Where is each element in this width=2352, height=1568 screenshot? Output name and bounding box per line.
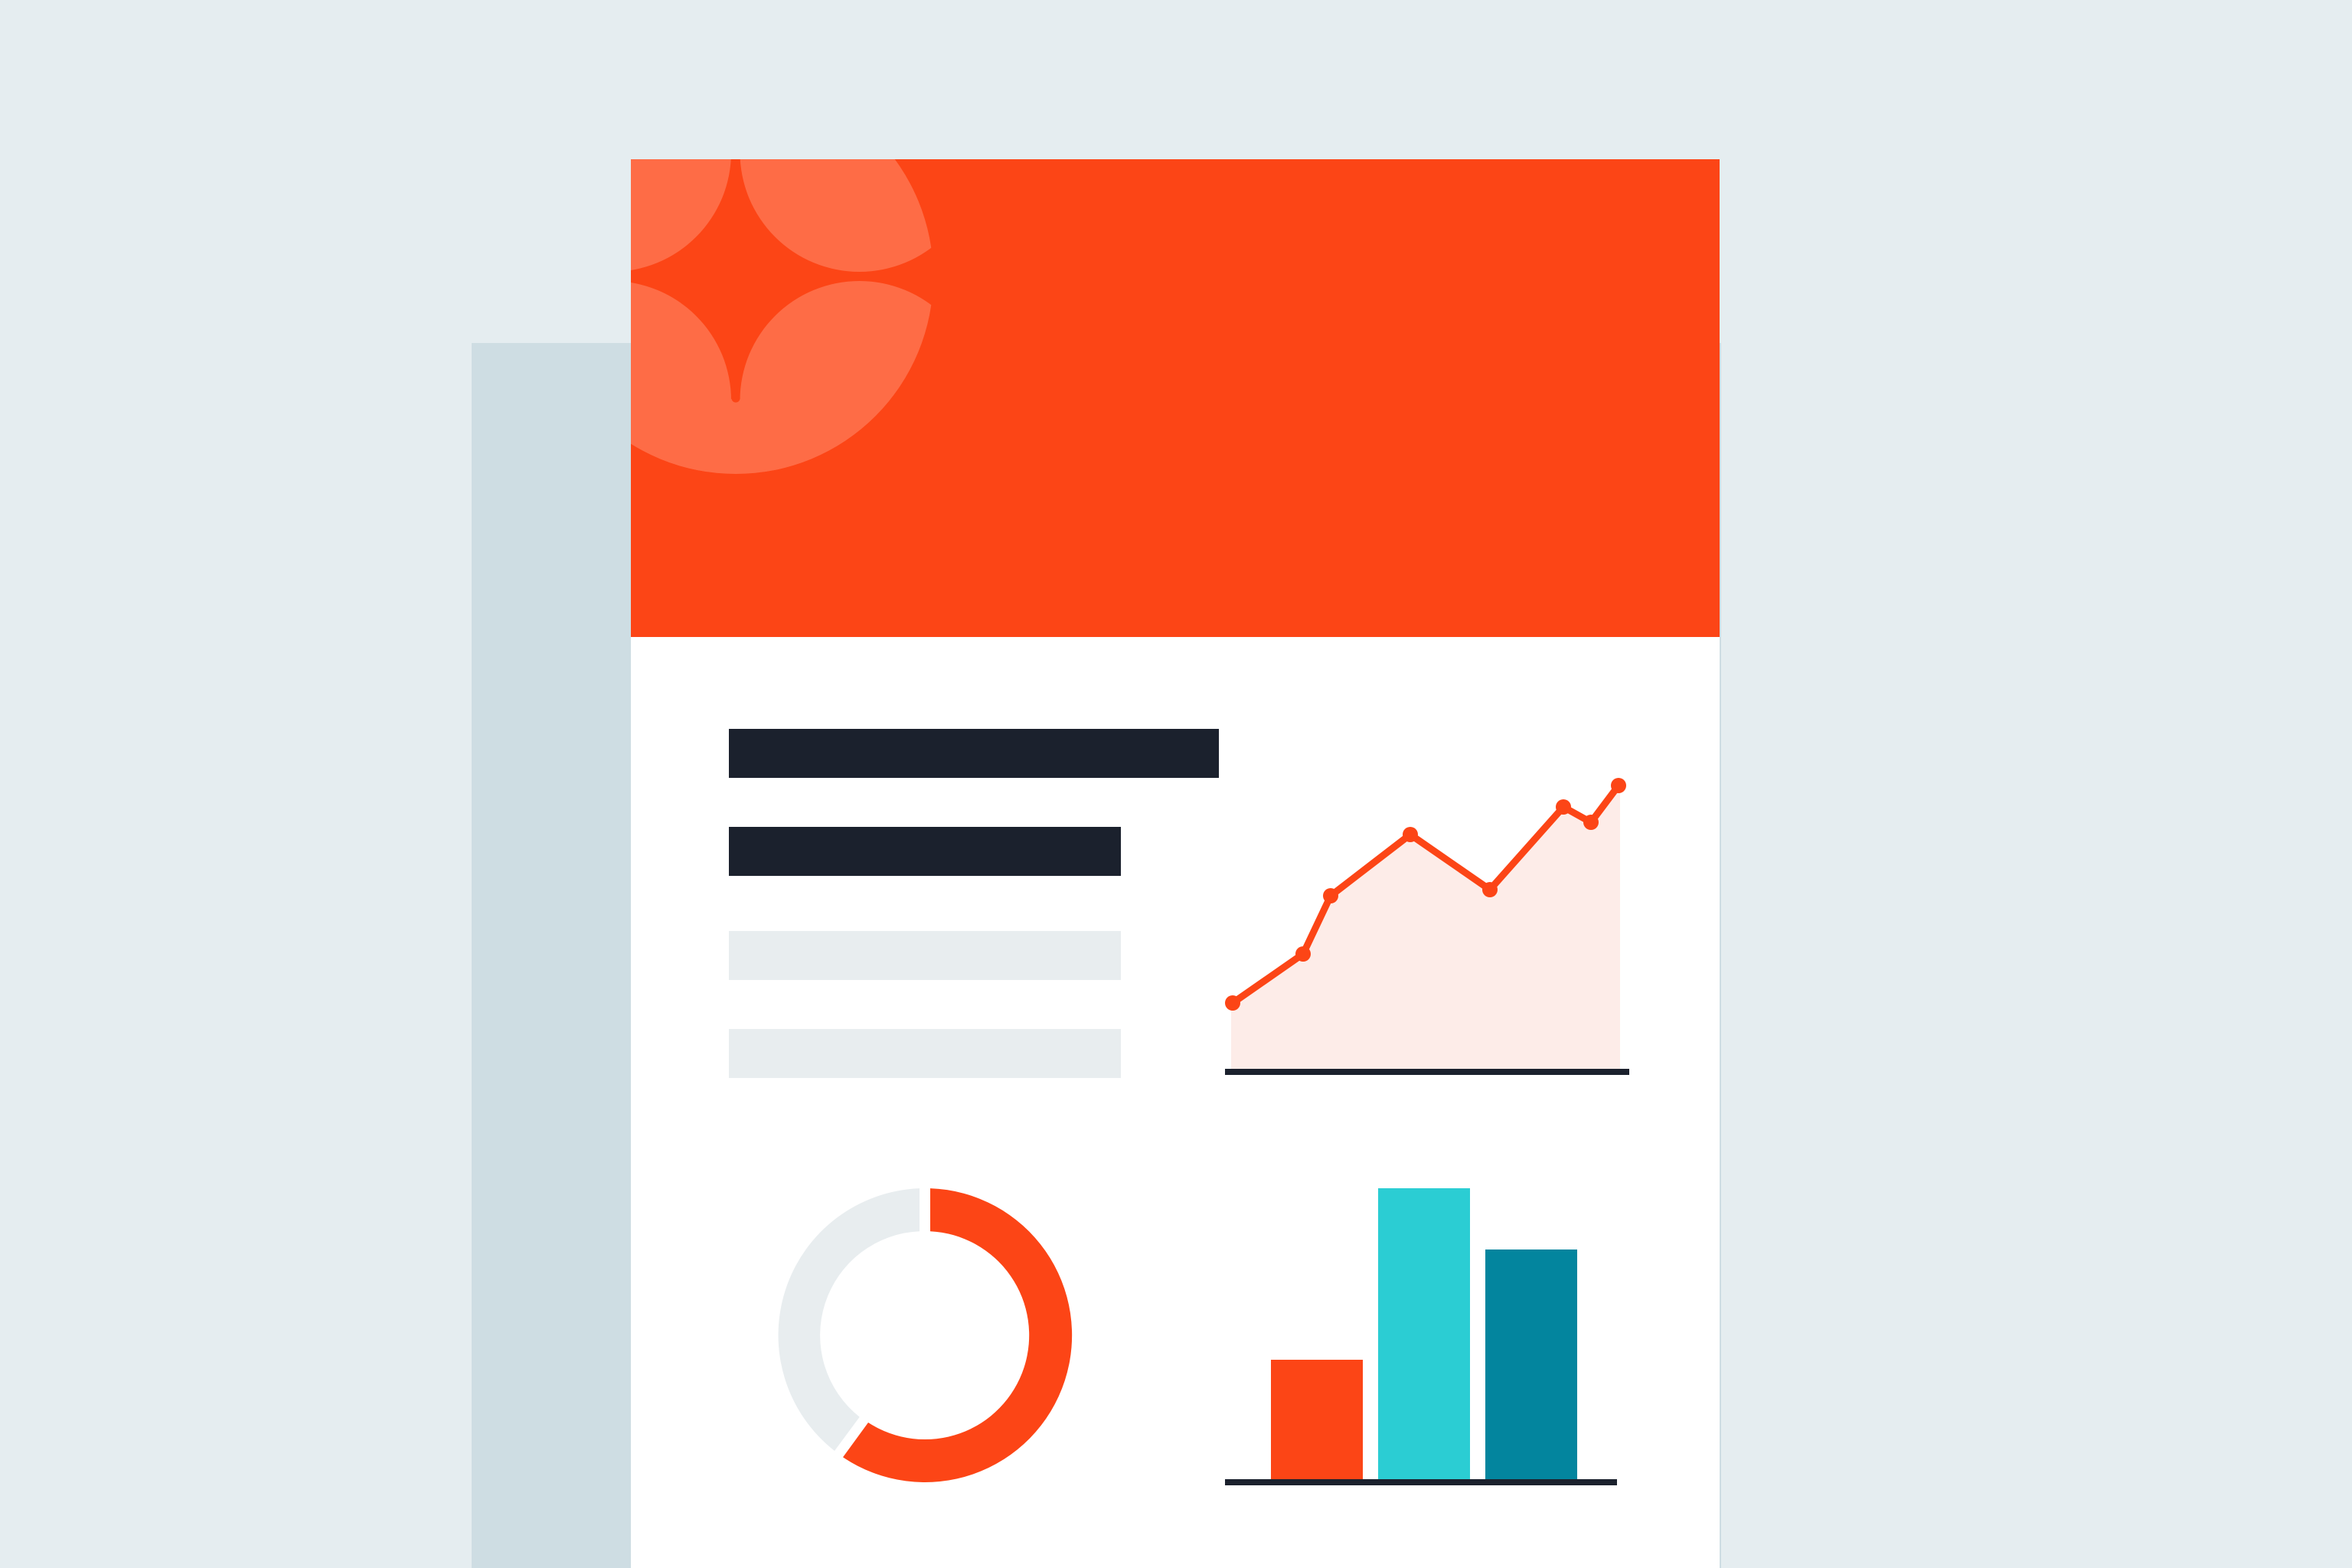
bar: orange bbox=[1271, 1360, 1363, 1479]
bar: cyan bbox=[1378, 1188, 1470, 1479]
donut segment: value bbox=[843, 1188, 1072, 1482]
logo: petal star mark bbox=[631, 159, 931, 474]
bar chart bbox=[1225, 1188, 1617, 1485]
donut chart bbox=[779, 1188, 1072, 1482]
report card bbox=[631, 159, 1720, 1568]
bar chart axis bbox=[1225, 1479, 1617, 1485]
text line: body 1 bbox=[729, 931, 1121, 980]
text line: heading 1 bbox=[729, 729, 1219, 778]
trend line bbox=[1233, 786, 1619, 1003]
data points bbox=[1225, 778, 1626, 1011]
text line: body 2 bbox=[729, 1029, 1121, 1078]
line chart axis bbox=[1225, 1069, 1629, 1075]
back page panel bbox=[472, 343, 1721, 1568]
line chart bbox=[1225, 778, 1629, 1075]
area fill bbox=[1231, 784, 1620, 1069]
bar: teal bbox=[1485, 1250, 1577, 1479]
text line: heading 2 bbox=[729, 827, 1121, 876]
donut segment: remainder bbox=[779, 1188, 920, 1451]
header banner bbox=[631, 159, 1720, 637]
